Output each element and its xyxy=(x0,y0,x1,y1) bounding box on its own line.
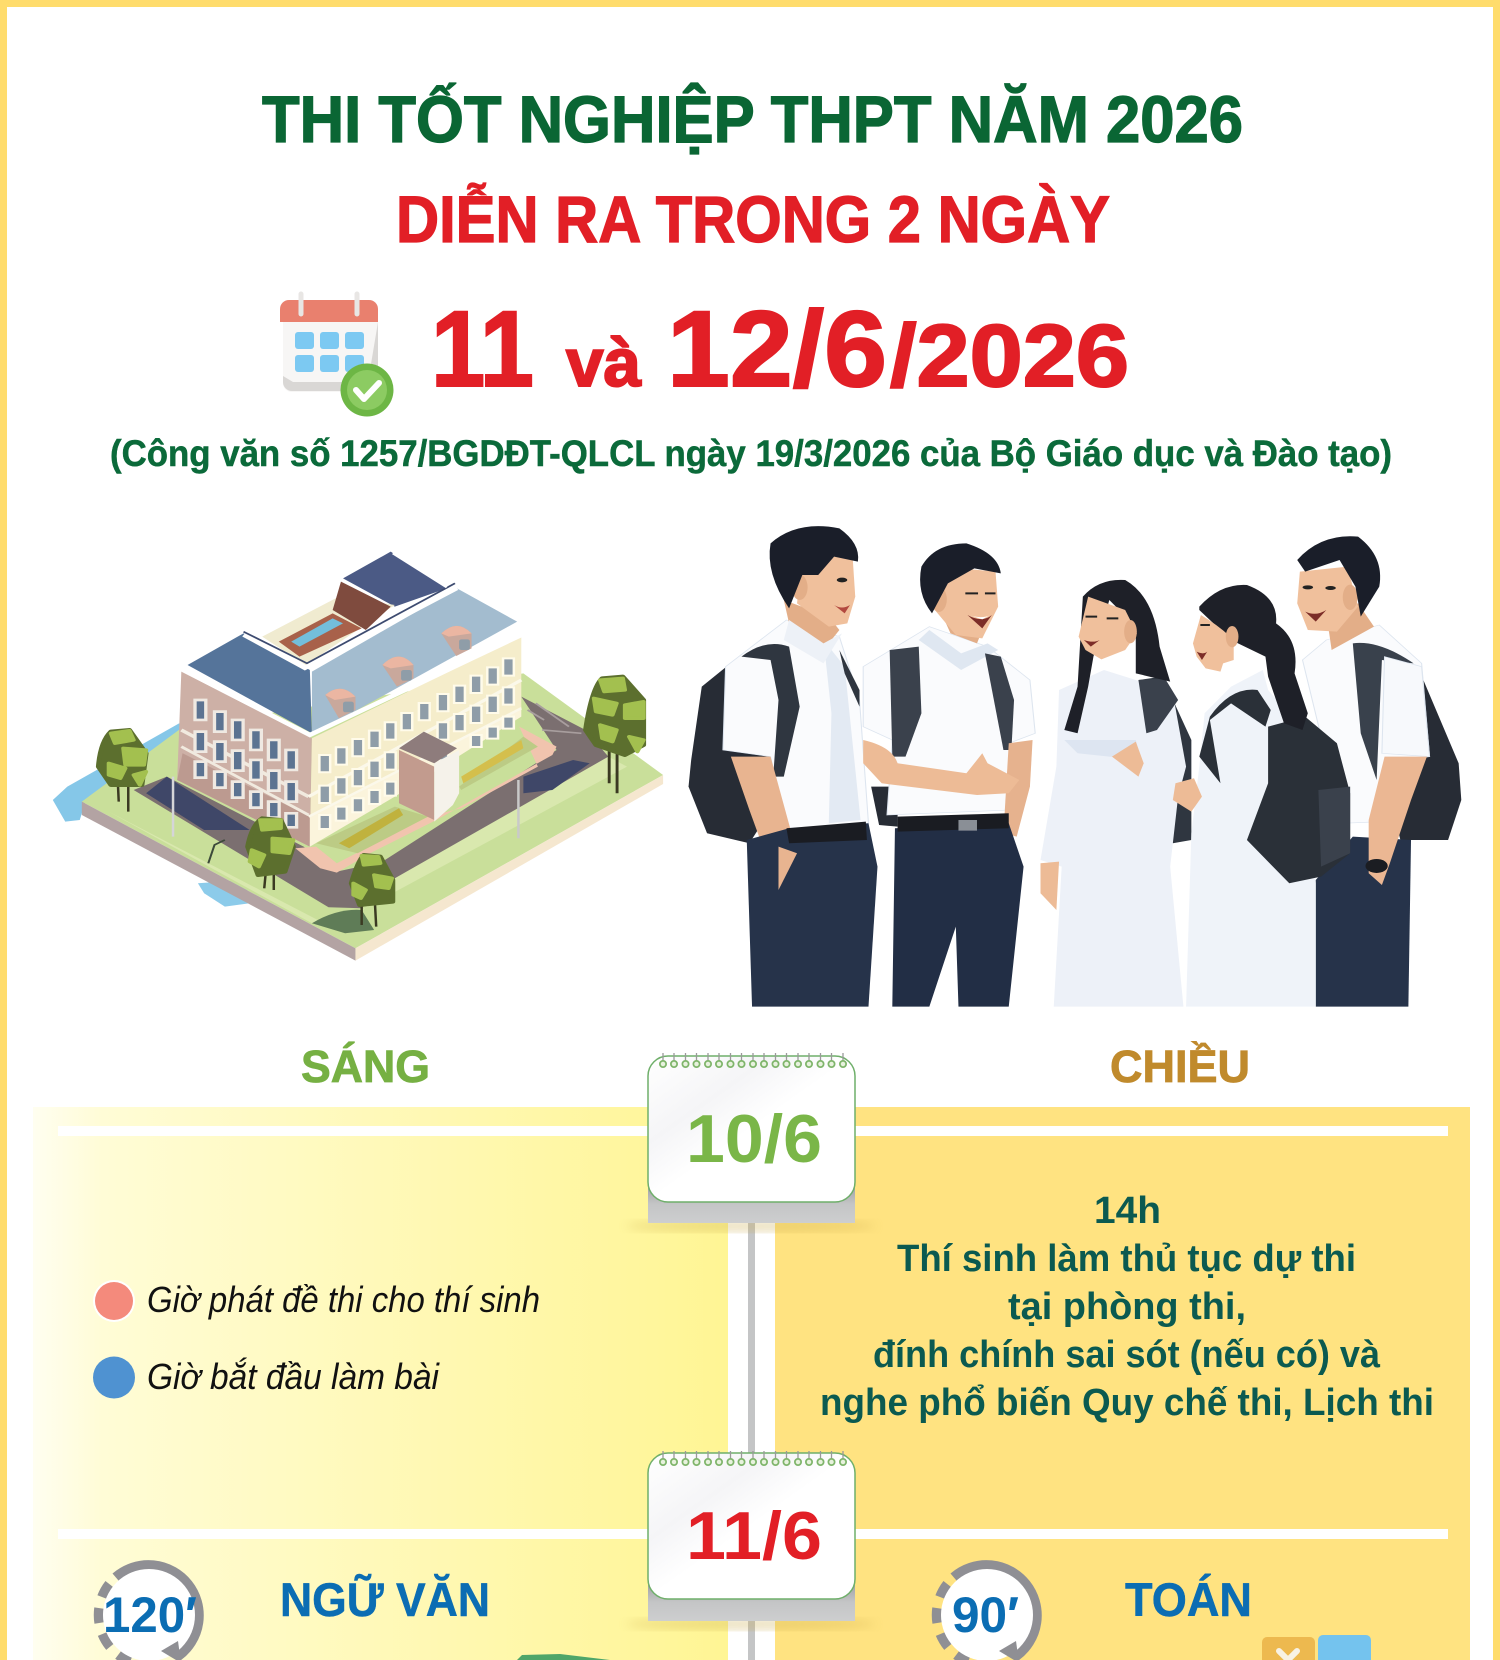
calendar card: 11/6: 11/6 xyxy=(686,1498,822,1574)
title xyxy=(262,82,1243,256)
student 4 xyxy=(1173,585,1350,1007)
legend xyxy=(93,1279,540,1398)
calendar card: 10/6 xyxy=(626,1053,876,1232)
duration badge: 120 minutes xyxy=(99,1565,199,1660)
duration badge: 90 minutes: 90′ xyxy=(952,1587,1019,1643)
tree xyxy=(98,730,146,812)
title: THI TỐT NGHIỆP THPT NĂM 2026 xyxy=(262,82,1243,156)
duration badge: 90 minutes xyxy=(937,1565,1037,1660)
column heading: afternoon: CHIỀU xyxy=(1110,1041,1250,1092)
exam dates: /2026 xyxy=(890,306,1129,405)
student 1 xyxy=(689,526,877,1007)
icon: calendar with check xyxy=(280,294,394,416)
timeline axis xyxy=(748,1107,755,1660)
calendar card: 10/6: 10/6 xyxy=(686,1101,822,1177)
text: 10/6 afternoon procedure: Thí sinh làm thủ tục dự thi xyxy=(897,1238,1356,1280)
row divider: 11/6 xyxy=(58,1529,1448,1539)
text: 10/6 afternoon procedure: đính chính sai sót (nếu có) và xyxy=(873,1334,1381,1376)
exam dates: 12/6 xyxy=(667,288,887,409)
text: 10/6 afternoon procedure: 14h xyxy=(1094,1190,1161,1232)
icon: math tiles xyxy=(1262,1635,1371,1660)
calendar card: 11/6 xyxy=(626,1451,876,1630)
exam dates xyxy=(431,288,1129,409)
student 5 xyxy=(1297,536,1461,1007)
row divider: 10/6 xyxy=(58,1126,1448,1136)
tree xyxy=(351,855,393,927)
tree xyxy=(248,818,293,890)
icon: book xyxy=(517,1654,610,1660)
text: 10/6 afternoon procedure xyxy=(820,1190,1434,1424)
legend: Giờ bắt đầu làm bài xyxy=(147,1356,440,1397)
text: 10/6 afternoon procedure: nghe phổ biến Quy chế thi, Lịch thi xyxy=(820,1382,1434,1424)
subject: literature: NGỮ VĂN xyxy=(280,1573,490,1626)
text: 10/6 afternoon procedure: tại phòng thi, xyxy=(1008,1286,1246,1328)
illustration: five students xyxy=(689,526,1461,1007)
column heading: morning: SÁNG xyxy=(301,1041,430,1092)
title: DIỄN RA TRONG 2 NGÀY xyxy=(396,182,1110,256)
legend: Giờ phát đề thi cho thí sinh xyxy=(147,1279,540,1320)
subject: mathematics: TOÁN xyxy=(1125,1573,1252,1626)
student 3 xyxy=(1041,580,1191,1007)
illustration: school building xyxy=(53,552,663,961)
duration badge: 120 minutes: 120′ xyxy=(103,1587,197,1643)
panel: afternoon column xyxy=(775,1107,1470,1660)
exam dates: 11 xyxy=(431,288,534,409)
exam dates: và xyxy=(566,325,641,401)
tree xyxy=(586,677,644,793)
panel: morning column xyxy=(33,1107,728,1660)
student 2 xyxy=(863,543,1035,1007)
official document reference: (Công văn số 1257/BGDĐT-QLCL ngày 19/3/2026 của Bộ Giáo dục và Đào tạo) xyxy=(110,433,1392,474)
